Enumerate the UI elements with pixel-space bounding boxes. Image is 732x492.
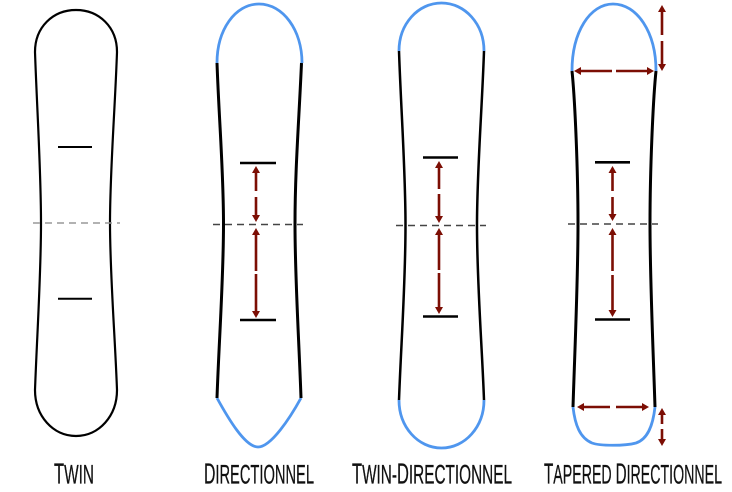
- tapered nose length arrow: [658, 5, 666, 71]
- directionnel left edge: [217, 63, 224, 398]
- twin-directionnel centre dashed line: [396, 224, 486, 226]
- tapered centre dashed line: [568, 223, 658, 225]
- directionnel upper insert line: [240, 162, 276, 164]
- label: directionnel: DIRECTIONNEL: [204, 458, 314, 490]
- tapered nose width arrow: [574, 67, 654, 75]
- tapered upper insert line: [595, 161, 630, 164]
- twin-directionnel tail: [399, 400, 484, 448]
- directionnel tail: [217, 398, 301, 447]
- tapered tail length arrow: [658, 408, 666, 446]
- tapered right edge: [650, 71, 656, 407]
- tapered tail: [573, 407, 655, 445]
- tapered left edge: [572, 71, 578, 407]
- twin centre dashed line: [33, 222, 120, 224]
- tapered upper arrow: [608, 166, 616, 221]
- twin-directionnel right edge: [477, 51, 484, 400]
- twin-directionnel lower insert line: [423, 315, 458, 318]
- directionnel right edge: [295, 63, 302, 398]
- twin-directionnel left edge: [399, 51, 406, 400]
- twin-directionnel nose: [399, 3, 484, 51]
- board: tapered directionnel: [568, 4, 666, 446]
- label: twin-directionnel: TWIN-DIRECTIONNEL: [352, 458, 512, 490]
- directionnel nose: [217, 4, 302, 63]
- tapered lower insert line: [595, 318, 630, 321]
- tapered lower arrow: [608, 228, 616, 317]
- twin lower insert line: [58, 298, 92, 300]
- tapered tail width arrow: [577, 403, 649, 411]
- twin-directionnel upper insert line: [423, 156, 458, 159]
- twin-directionnel lower arrow: [435, 228, 443, 314]
- directionnel upper arrow: [252, 166, 260, 222]
- directionnel lower arrow: [252, 228, 260, 318]
- directionnel lower insert line: [240, 319, 276, 321]
- board: twin-directionnel: [396, 3, 486, 448]
- twin upper insert line: [58, 146, 92, 148]
- label: twin: TWIN: [54, 458, 94, 490]
- board: directionnel: [213, 4, 303, 447]
- twin-directionnel upper arrow: [435, 161, 443, 223]
- directionnel centre dashed line: [213, 224, 303, 226]
- tapered nose: [572, 4, 656, 71]
- twin outline: [35, 10, 117, 436]
- board: twin: [33, 10, 120, 436]
